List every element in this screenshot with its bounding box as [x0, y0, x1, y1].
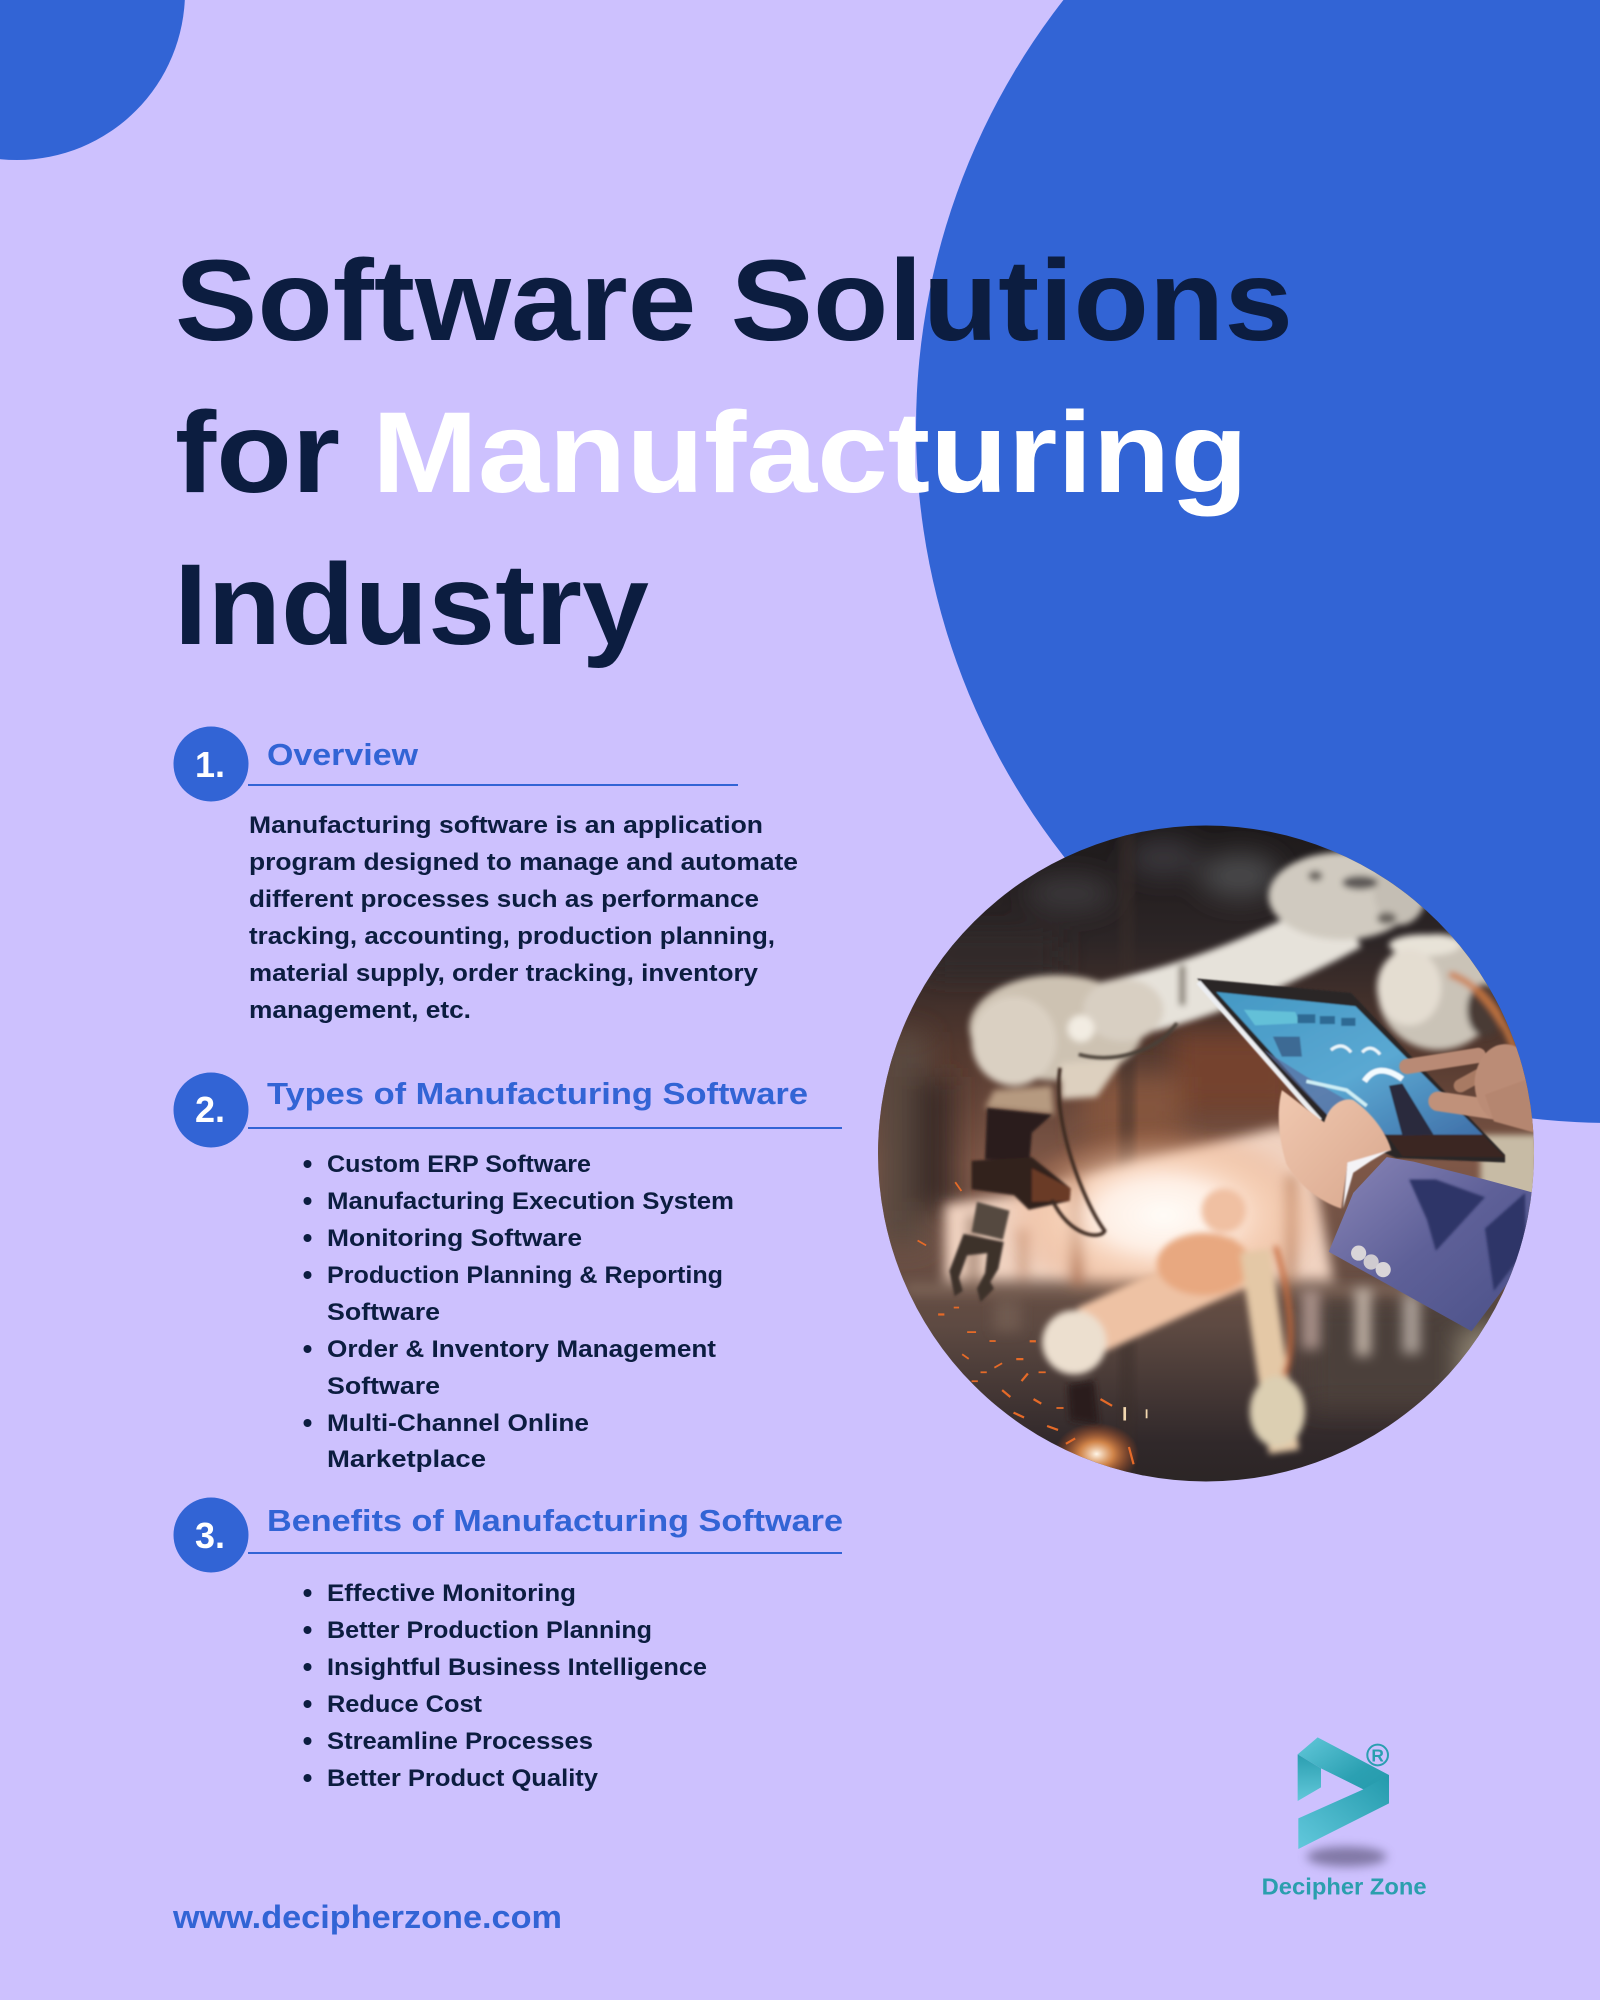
title: for — [175, 389, 340, 517]
sleeve — [1329, 1157, 1534, 1331]
types list: Manufacturing Execution System — [327, 1188, 734, 1215]
logo mark — [1298, 1737, 1389, 1849]
overview paragraph: different processes such as performance — [249, 886, 759, 913]
heading: types: Types of Manufacturing Software — [267, 1076, 808, 1111]
title: Software Solutions — [175, 237, 1293, 365]
section 1: overview — [174, 726, 798, 1024]
badge 2: 2. — [195, 1089, 225, 1130]
overview paragraph: management, etc. — [249, 997, 471, 1024]
types list: Custom ERP Software — [327, 1151, 591, 1178]
overview paragraph: material supply, order tracking, inventory — [249, 960, 758, 987]
types list: Software — [327, 1373, 440, 1400]
photo: robot arms and tablet in circle — [878, 826, 1534, 1482]
logo shadow — [1307, 1847, 1387, 1867]
badge 1: 1. — [195, 744, 225, 785]
benefits list: Insightful Business Intelligence — [327, 1654, 707, 1681]
registered mark: R — [1371, 1745, 1384, 1765]
benefits list: Effective Monitoring — [327, 1580, 576, 1607]
types list: Monitoring Software — [327, 1225, 582, 1252]
registered mark — [1367, 1745, 1388, 1765]
types list: Software — [327, 1299, 440, 1326]
title: Manufacturing — [372, 389, 1248, 517]
overview paragraph: tracking, accounting, production planning, — [249, 923, 775, 950]
tablet — [1197, 979, 1505, 1162]
overview paragraph: program designed to manage and automate — [249, 849, 798, 876]
badge 3 — [174, 1498, 248, 1572]
badge 1 — [174, 726, 248, 802]
left hand and cuff — [1279, 1090, 1391, 1208]
benefits list: Reduce Cost — [327, 1691, 482, 1718]
section 2: types — [174, 1072, 842, 1473]
title — [174, 237, 1293, 669]
types list: Order & Inventory Management — [327, 1336, 716, 1363]
upper robot arm — [969, 852, 1539, 1211]
badge 3: 3. — [195, 1515, 225, 1556]
benefits list: Better Production Planning — [327, 1617, 652, 1644]
types list: Marketplace — [327, 1446, 486, 1473]
types list — [304, 1151, 734, 1473]
benefits list: Streamline Processes — [327, 1728, 593, 1755]
welding sparks — [917, 1182, 1147, 1485]
heading: benefits: Benefits of Manufacturing Software — [267, 1503, 843, 1538]
overview paragraph — [249, 812, 798, 1024]
section 3: benefits — [174, 1498, 843, 1792]
dark wrist and gripper — [949, 1023, 1177, 1302]
right hand — [1407, 1044, 1535, 1133]
title: Industry — [174, 541, 649, 669]
overview paragraph: Manufacturing software is an application — [249, 812, 763, 839]
logo wordmark: Decipher Zone — [1262, 1873, 1427, 1899]
factory light — [905, 1126, 1420, 1356]
website url: www.decipherzone.com — [172, 1899, 562, 1935]
large blue circle — [916, 0, 1600, 1123]
badge 2 — [174, 1072, 248, 1148]
heading: overview: Overview — [267, 737, 419, 772]
types list: Production Planning & Reporting — [327, 1262, 723, 1289]
lower robot arm — [1042, 1188, 1305, 1452]
types list: Multi-Channel Online — [327, 1410, 589, 1437]
benefits list — [304, 1580, 707, 1792]
benefits list: Better Product Quality — [327, 1765, 598, 1792]
logo: Decipher Zone — [1262, 1737, 1427, 1899]
decorative corner circle — [0, 0, 185, 160]
